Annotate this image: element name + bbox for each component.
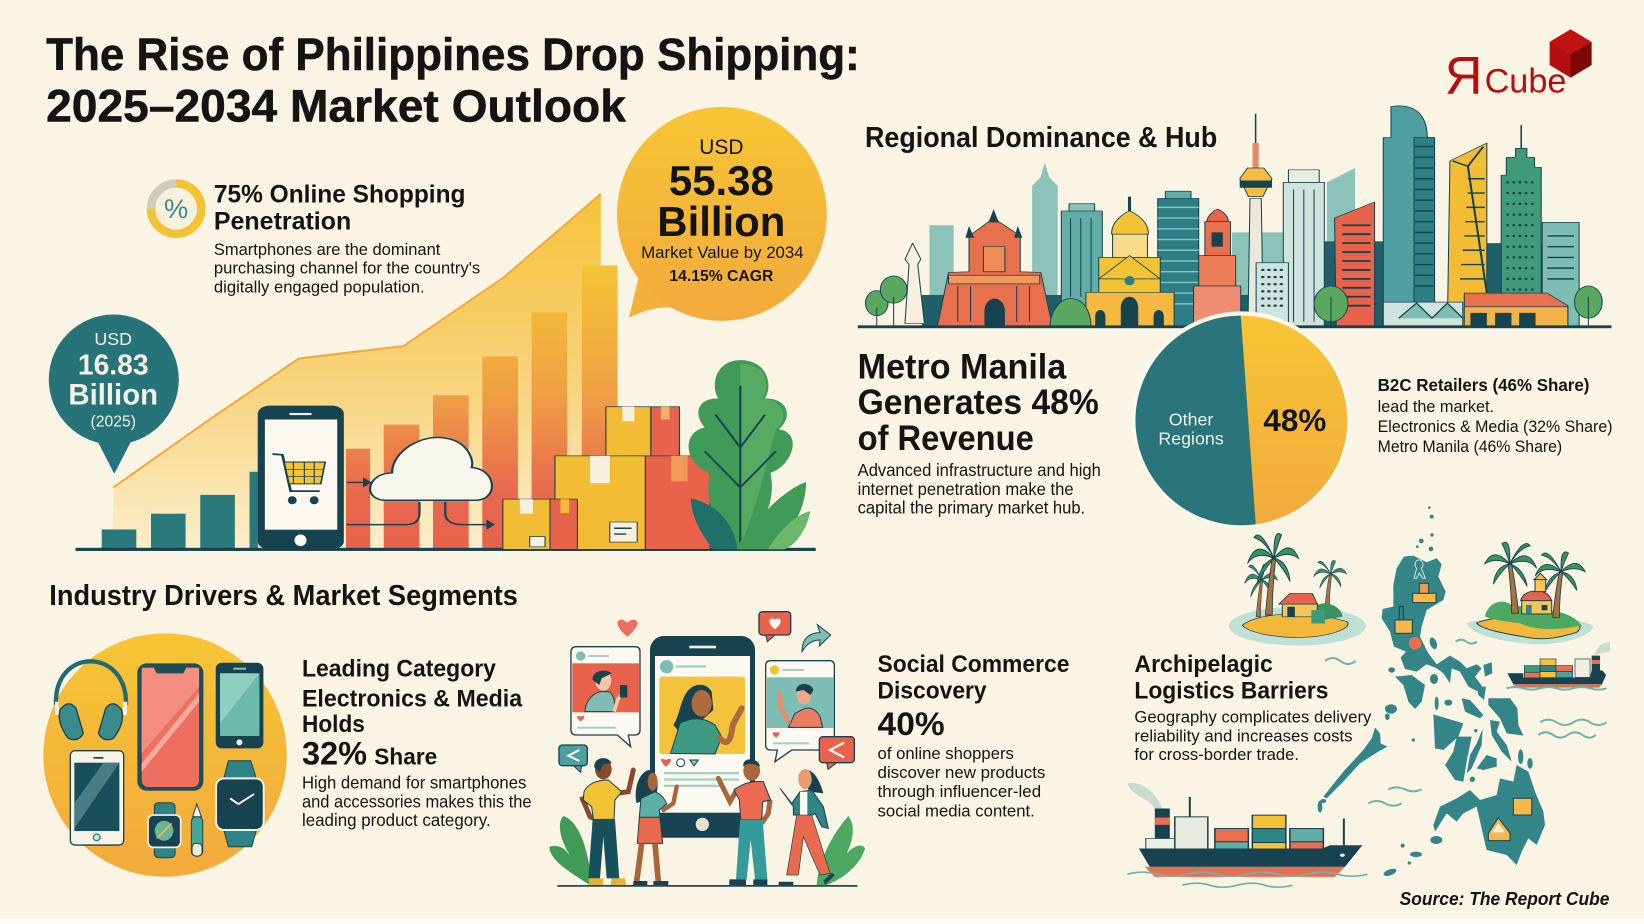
text: segment shares xyxy=(1378,375,1613,456)
island: bohol xyxy=(1477,755,1497,770)
church xyxy=(937,209,1053,327)
heading: regional dominance: Regional Dominance & Hub xyxy=(865,121,1217,153)
red modern tower xyxy=(1335,202,1375,327)
island: luzon xyxy=(1382,556,1483,691)
illustration: electronics circle xyxy=(43,633,287,877)
text: social commerce xyxy=(878,651,1069,821)
social card: left post xyxy=(571,647,640,747)
windowed block xyxy=(1256,263,1288,327)
icon: stylus xyxy=(191,804,203,856)
text: archipelagic logistics: Archipelagic xyxy=(1134,651,1273,678)
bubble: 2034 value: 55.38 xyxy=(669,157,774,204)
ground line xyxy=(858,325,1611,328)
text: segment shares: Electronics & Media (32% Share) xyxy=(1378,417,1613,436)
island: mindoro xyxy=(1395,675,1425,709)
text: social commerce: of online shoppers xyxy=(878,744,1014,763)
map: philippines xyxy=(1318,506,1610,877)
text: metro manila: Advanced infrastructure and high xyxy=(858,460,1101,480)
island: palawan xyxy=(1323,728,1387,798)
logo: RCube xyxy=(1445,29,1592,105)
icon: heart bubble xyxy=(759,612,791,642)
illustration: phone, cloud, parcels, plant xyxy=(258,360,810,549)
island and large ship xyxy=(1127,533,1367,887)
logo: RCube: Cube xyxy=(1485,62,1566,100)
title: The Rise of Philippines Drop Shipping: xyxy=(46,29,860,80)
icon: percent donut xyxy=(151,183,201,234)
person: yellow shirt xyxy=(582,758,633,885)
bubble: 2034 value: Billion xyxy=(657,198,785,245)
callout: online shopping penetration xyxy=(214,180,480,297)
pie chart: metro manila share xyxy=(1122,309,1350,529)
icon: phone with cart xyxy=(258,406,344,549)
island: right with church xyxy=(1467,542,1593,644)
island: mindanao xyxy=(1433,765,1545,865)
text: social commerce: social media content. xyxy=(878,802,1035,821)
callout: online shopping penetration: digitally engaged population. xyxy=(214,278,425,297)
striped tower xyxy=(1158,191,1199,327)
icon: small watch xyxy=(148,803,181,858)
icon: cloud with flow arrows xyxy=(347,437,495,530)
bubble: 2025 value xyxy=(49,315,179,474)
text: metro manila: of Revenue xyxy=(858,418,1034,458)
teal mid tower xyxy=(1061,204,1102,327)
green tower xyxy=(1501,125,1541,307)
domed cathedral xyxy=(1086,197,1174,327)
person: teal jacket xyxy=(779,769,835,885)
teal bars xyxy=(102,472,258,548)
icon: parcel stack xyxy=(503,407,710,549)
icon: large watch xyxy=(216,761,264,847)
icon: plant xyxy=(689,360,810,549)
illustration: archipelago map, islands and ships xyxy=(1127,506,1610,887)
text: leading category: Electronics & Media xyxy=(302,686,523,713)
title xyxy=(46,29,860,132)
text: metro manila: Generates 48% xyxy=(858,382,1099,422)
illustration: social commerce xyxy=(549,612,865,887)
text: archipelagic logistics: for cross-border trade. xyxy=(1134,745,1299,764)
bubble: 2034 value xyxy=(617,107,827,321)
icon: headphones xyxy=(55,661,127,740)
title: 2025–2034 Market Outlook xyxy=(46,81,627,132)
island: left with house xyxy=(1229,533,1366,645)
text: segment shares: Metro Manila (46% Share) xyxy=(1378,437,1562,456)
icon: heart xyxy=(617,620,637,637)
text: metro manila: capital the primary market hub. xyxy=(858,498,1085,518)
tall teal skyscraper xyxy=(1383,106,1435,307)
low red hall xyxy=(1464,293,1568,327)
observation tower xyxy=(1240,114,1272,327)
pie chart: metro manila share: Other xyxy=(1169,410,1213,430)
text: leading category: Leading Category xyxy=(302,655,496,682)
text: metro manila xyxy=(858,346,1101,518)
island: masbate xyxy=(1462,698,1483,718)
ground line xyxy=(557,885,857,887)
text: leading category: leading product category. xyxy=(302,810,491,830)
heading: industry drivers: Industry Drivers & Market Segments xyxy=(49,579,518,611)
icon: main phone xyxy=(650,636,755,838)
text: leading category: Holds xyxy=(302,711,365,738)
bubble: 2034 value: USD xyxy=(699,136,743,159)
waves xyxy=(1325,640,1607,806)
yellow angular tower xyxy=(1447,143,1487,327)
text: leading category: 32% xyxy=(302,735,367,771)
icon: percent donut: % xyxy=(164,193,188,224)
pie chart: metro manila share: Regions xyxy=(1158,429,1224,449)
icon: large phone xyxy=(137,663,203,791)
text: leading category: and accessories makes this the xyxy=(302,791,532,811)
bubble: 2025 value: USD xyxy=(94,329,132,349)
person: red shirt xyxy=(718,759,771,885)
area trend xyxy=(113,194,618,548)
text: archipelagic logistics: reliability and increases costs xyxy=(1134,726,1353,745)
illustration: city skyline xyxy=(858,106,1611,328)
island: negros xyxy=(1445,737,1472,782)
source: Source: The Report Cube xyxy=(1400,888,1609,909)
text: social commerce: discover new products xyxy=(878,763,1045,782)
icon: white phone xyxy=(70,751,124,845)
text: segment shares: B2C Retailers (46% Share) xyxy=(1378,375,1590,395)
growth chart xyxy=(76,194,816,551)
island: samar xyxy=(1488,698,1523,736)
logo: RCube: Я xyxy=(1445,47,1483,105)
icon: share bubble left xyxy=(559,745,587,772)
text: social commerce: 40% xyxy=(878,706,945,742)
text: segment shares: lead the market. xyxy=(1378,397,1494,416)
text: archipelagic logistics: Logistics Barriers xyxy=(1134,677,1328,704)
bubble: 2034 value: Market Value by 2034 xyxy=(641,244,804,262)
island: cebu xyxy=(1467,729,1483,773)
text: leading category: Share xyxy=(374,743,437,769)
trees xyxy=(865,276,1602,327)
island: panay xyxy=(1433,714,1463,750)
icon: share bubble right xyxy=(819,737,854,769)
ship: large container vessel xyxy=(1127,783,1362,877)
text: archipelagic logistics xyxy=(1134,651,1372,764)
callout: online shopping penetration: Smartphones are the dominant xyxy=(214,240,441,259)
bubble: 2025 value: (2025) xyxy=(91,414,136,431)
social card: right post xyxy=(766,661,834,762)
text: archipelagic logistics: Geography complicates delivery xyxy=(1134,707,1372,726)
icon: share arrow xyxy=(802,625,831,652)
person: teal top, red skirt xyxy=(633,770,677,885)
bubble: 2025 value: 16.83 xyxy=(78,348,149,380)
icon: small phone xyxy=(216,663,263,748)
waves under ship xyxy=(1127,872,1367,887)
bubble: 2025 value: Billion xyxy=(68,379,158,412)
text: leading category xyxy=(302,655,532,830)
tall pale tower xyxy=(1283,170,1324,327)
red clock tower xyxy=(1194,209,1241,327)
callout: online shopping penetration: 75% Online Shopping xyxy=(214,180,466,208)
background buildings xyxy=(930,163,1355,327)
orange bars xyxy=(346,266,618,548)
text: leading category: High demand for smartphones xyxy=(302,772,527,792)
bubble: 2034 value: 14.15% CAGR xyxy=(669,268,774,285)
pie chart: metro manila share: 48% xyxy=(1263,403,1326,438)
text: metro manila: internet penetration make the xyxy=(858,479,1074,499)
text: social commerce: Social Commerce xyxy=(878,651,1069,678)
callout: online shopping penetration: purchasing channel for the country's xyxy=(214,259,480,278)
ship: small xyxy=(1507,642,1610,688)
callout: online shopping penetration: Penetration xyxy=(214,208,351,236)
plants xyxy=(549,816,865,885)
text: social commerce: Discovery xyxy=(878,677,987,704)
pale teal block xyxy=(1542,222,1579,327)
island: leyte xyxy=(1490,720,1512,762)
baseline xyxy=(76,548,816,551)
glass pavilion xyxy=(1383,302,1463,327)
text: social commerce: through influencer-led xyxy=(878,782,1041,801)
lighthouse xyxy=(905,243,924,324)
text: metro manila: Metro Manila xyxy=(858,346,1067,386)
map markers xyxy=(1395,560,1532,841)
